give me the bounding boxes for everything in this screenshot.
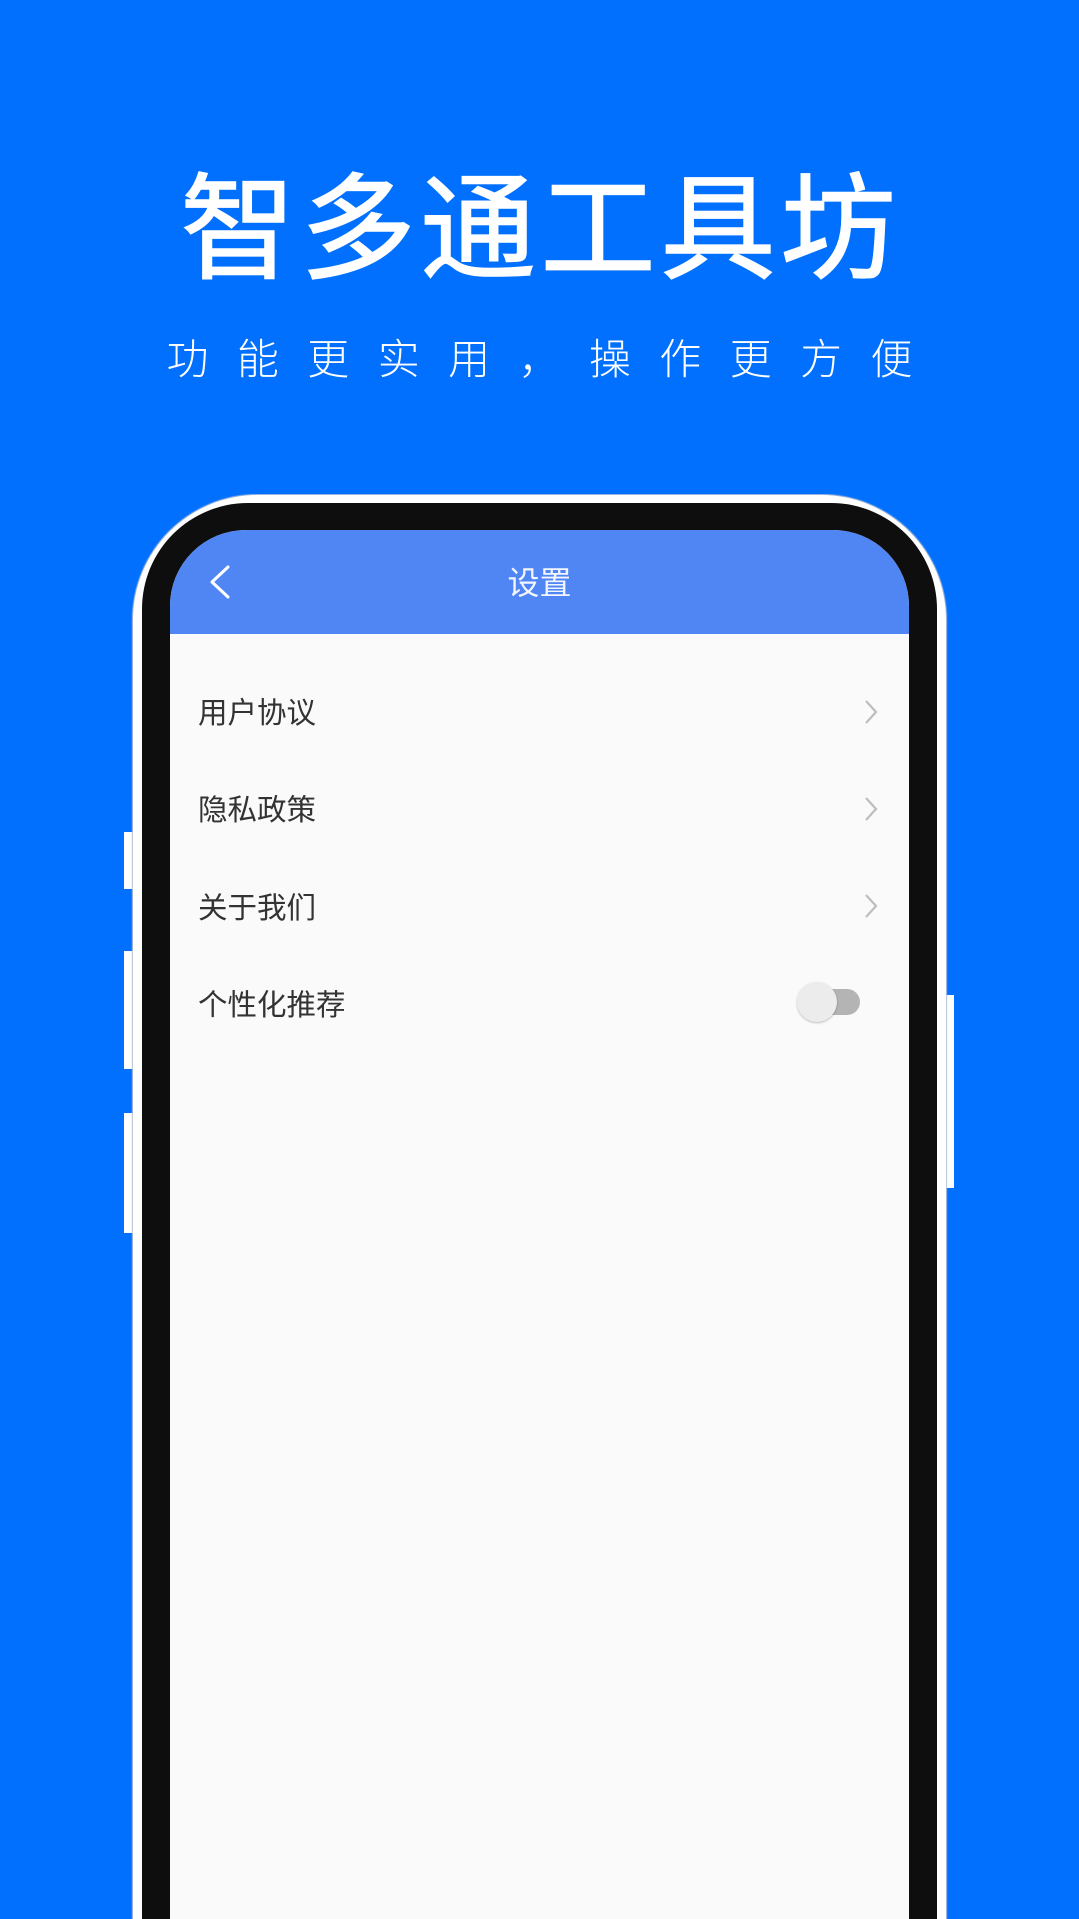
- toggle knob: [797, 982, 837, 1022]
- title: 智多通工具坊: [180, 166, 901, 294]
- header bar: [170, 530, 909, 634]
- phone white outer frame: [132, 494, 946, 1919]
- left side button 1: [124, 832, 136, 889]
- header title: 设置: [507, 565, 572, 601]
- icon: chevron: [865, 797, 878, 821]
- phone screen: [170, 530, 909, 1919]
- row: user agreement: 用户协议: [198, 697, 316, 730]
- icon: back arrow: [210, 565, 230, 599]
- toggle track: [809, 989, 860, 1015]
- left side button 2: [124, 951, 136, 1069]
- icon: chevron: [865, 894, 878, 918]
- row: personalized recommendation: 个性化推荐: [198, 989, 346, 1022]
- right side button: [942, 995, 954, 1188]
- row: privacy policy: 隐私政策: [198, 794, 316, 827]
- subtitle: 功能更实用，操作更方便: [166, 336, 941, 383]
- row: about us: 关于我们: [198, 892, 316, 925]
- phone mockup: [124, 494, 954, 1919]
- left side button 3: [124, 1113, 136, 1233]
- icon: chevron: [865, 700, 878, 724]
- phone black bezel: [142, 503, 937, 1919]
- settings list: [198, 697, 878, 1024]
- toggle switch: [796, 982, 860, 1024]
